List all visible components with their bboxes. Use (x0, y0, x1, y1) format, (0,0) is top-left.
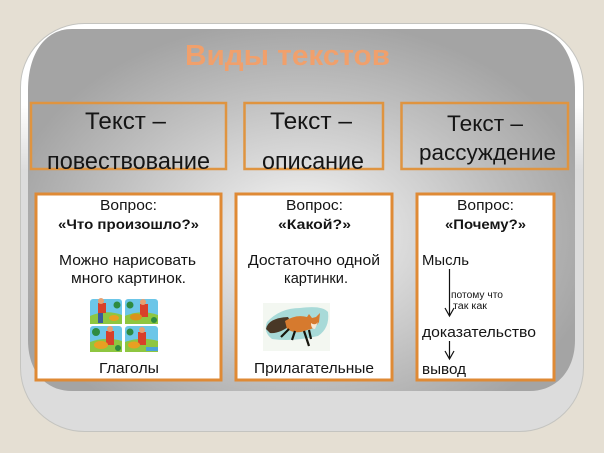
description (248, 253, 380, 287)
panel: description details (236, 194, 392, 380)
panel: narrative heading: повествование (47, 148, 210, 175)
panel: reasoning heading (402, 103, 568, 169)
description: Можно нарисовать (59, 253, 196, 269)
description: Достаточно одной (248, 253, 380, 269)
question: Вопрос: (100, 198, 157, 214)
label: adjectives: Прилагательные (254, 361, 374, 377)
conclusion: вывод (422, 362, 467, 378)
thought: Мысль (422, 253, 469, 269)
icon: four story pictures (90, 298, 158, 352)
connectors: так как (453, 301, 488, 312)
panel: description heading: Текст – (270, 108, 353, 135)
panel: reasoning heading: рассуждение (419, 140, 556, 165)
arrow: thought to proof (445, 269, 454, 316)
panel: reasoning details (417, 194, 554, 380)
description: много картинок. (71, 271, 186, 287)
icon: fox (263, 303, 330, 351)
panel: description heading (244, 103, 383, 175)
description: картинки. (284, 271, 348, 287)
question: Вопрос: (457, 198, 514, 214)
proof: доказательство (422, 325, 536, 341)
arrow: proof to conclusion (445, 341, 454, 359)
question: Вопрос: (286, 198, 343, 214)
panel: narrative details (36, 194, 221, 380)
connectors: потому что (451, 290, 503, 301)
panel: reasoning heading: Текст – (447, 111, 524, 136)
connectors (451, 290, 503, 312)
panel: description heading: описание (262, 148, 364, 175)
label: verbs: Глаголы (99, 361, 159, 377)
question text: «Что произошло?» (58, 217, 199, 232)
panel: narrative heading (31, 103, 226, 175)
question text: «Какой?» (278, 217, 351, 232)
title: Виды текстов (185, 40, 390, 72)
question text: «Почему?» (445, 217, 526, 232)
panel: narrative heading: Текст – (85, 108, 167, 135)
description (59, 253, 196, 287)
